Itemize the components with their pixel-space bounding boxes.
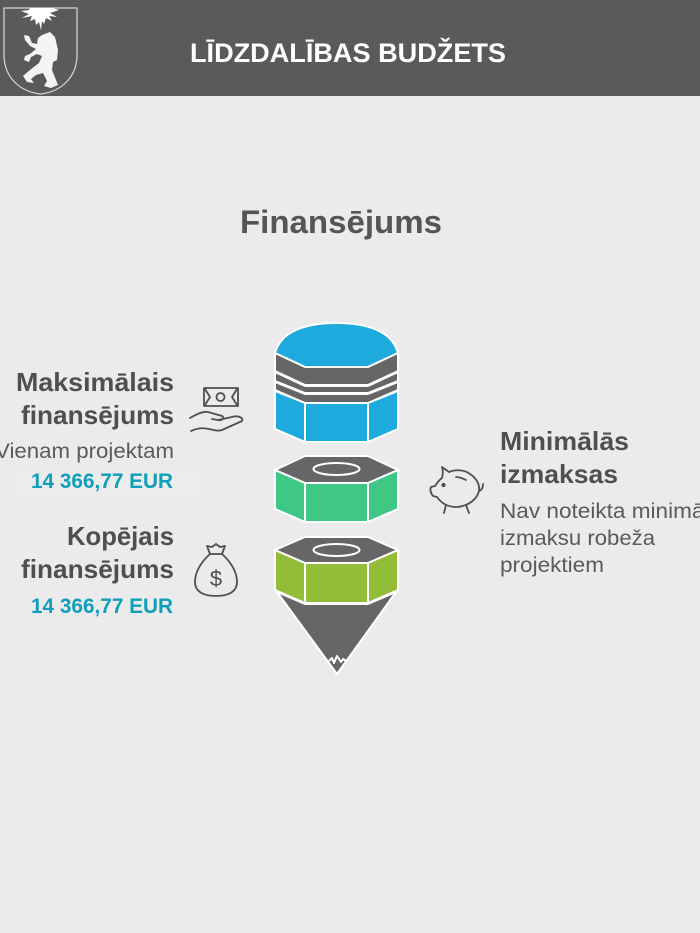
icon: money on hand <box>190 388 242 431</box>
panel: left maximum funding text: Maksimālais <box>16 367 174 397</box>
header title: LĪDZDALĪBAS BUDŽETS <box>190 37 506 68</box>
funnel diagram <box>275 323 398 674</box>
panel: left total funding text: Kopējais <box>67 521 174 551</box>
panel: right minimum cost text: izmaksu robeža <box>500 527 655 550</box>
panel: left maximum funding text: finansējums <box>21 400 174 430</box>
icon: money bag: $ <box>210 566 222 591</box>
icon: money bag <box>195 544 237 596</box>
heading: Finansējums <box>240 204 442 240</box>
panel: right minimum cost text: Minimālās <box>500 426 629 456</box>
panel: right minimum cost text: projektiem <box>500 554 604 577</box>
panel: left total funding text <box>21 521 174 618</box>
panel: left total funding text: finansējums <box>21 554 174 584</box>
panel: left total funding text: 14 366,77 EUR <box>31 595 173 618</box>
olive segment <box>275 537 398 603</box>
panel: left maximum funding text: Vienam projektam <box>0 440 174 463</box>
panel: left maximum funding text: 14 366,77 EUR <box>31 470 173 493</box>
header bar <box>0 0 700 96</box>
panel: right minimum cost text: izmaksas <box>500 459 618 489</box>
panel: left maximum funding text <box>0 367 174 493</box>
faint patches <box>10 468 200 500</box>
icon: piggy bank <box>430 467 483 513</box>
grey cone tip <box>277 592 396 674</box>
blue cylinder segment <box>275 323 398 442</box>
green segment <box>275 456 398 522</box>
panel: right minimum cost text <box>500 426 700 577</box>
icon: coat of arms <box>4 8 77 94</box>
